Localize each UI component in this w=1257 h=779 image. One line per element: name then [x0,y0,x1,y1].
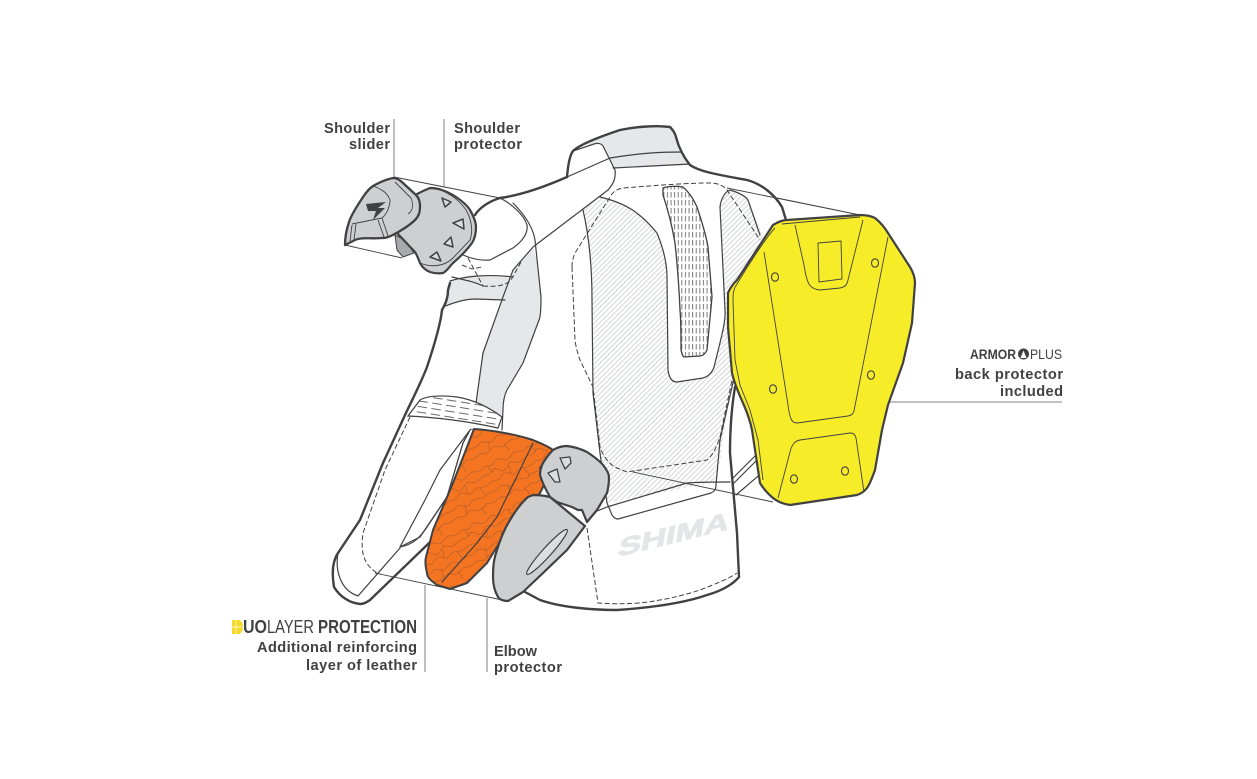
label: shoulder protector: Shoulder [454,121,520,137]
mesh back panel [583,190,765,503]
icon: shoulder protector [395,188,476,273]
elbow cap [540,446,609,522]
label: ARMOR PLUS back protector: ARMOR [970,347,1016,362]
label: ARMOR PLUS back protector: included [1000,384,1063,400]
label: shoulder slider: slider [349,137,390,153]
label: duolayer protection: layer of leather [306,658,417,674]
icon: shoulder slider [345,178,420,245]
sleeve grey band [476,247,541,418]
collar [580,126,690,168]
label: duolayer protection: PROTECTION [318,617,417,637]
icon: back protector [728,215,915,505]
elbow vents [548,457,571,482]
icon: elbow protector [493,446,609,601]
mesh spine panel [663,186,712,357]
guard slot [524,527,570,577]
logo: SHIMA: SHIMA [616,507,732,563]
protector plate [728,215,915,505]
leather patch [425,429,553,589]
icon: duolayer mark [232,620,243,634]
label: duolayer protection: LAYER [267,617,314,637]
cuff mesh [408,396,502,428]
label: shoulder protector: protector [454,137,522,153]
cuff stripe [400,430,470,547]
logo mark [366,202,386,220]
label: ARMOR PLUS back protector: back protector [955,367,1063,383]
label: elbow protector [494,644,562,676]
label: elbow protector: protector [494,660,562,676]
plate contours [733,217,860,480]
label: duolayer protection [232,617,417,674]
upper arm band [443,275,513,307]
protector shell [397,188,476,273]
orange leather layer [425,429,553,589]
jacket illustration [333,126,786,610]
rivets [770,259,878,483]
jacket outline [567,126,786,220]
body seams [583,210,607,503]
label: elbow protector: Elbow [494,644,538,660]
protector underside [395,235,414,257]
label: ARMOR PLUS back protector: PLUS [1030,347,1062,362]
label: shoulder slider [324,121,390,153]
label: ARMOR PLUS back protector [955,347,1063,400]
protector vents [430,198,464,261]
label: shoulder slider: Shoulder [324,121,390,137]
forearm guard [493,495,585,601]
slider shell [345,178,420,245]
label: shoulder protector [454,121,522,153]
label: duolayer protection: UO [243,617,267,637]
label: duolayer protection: Additional reinforcing [257,640,417,656]
leader lines [345,119,1062,672]
